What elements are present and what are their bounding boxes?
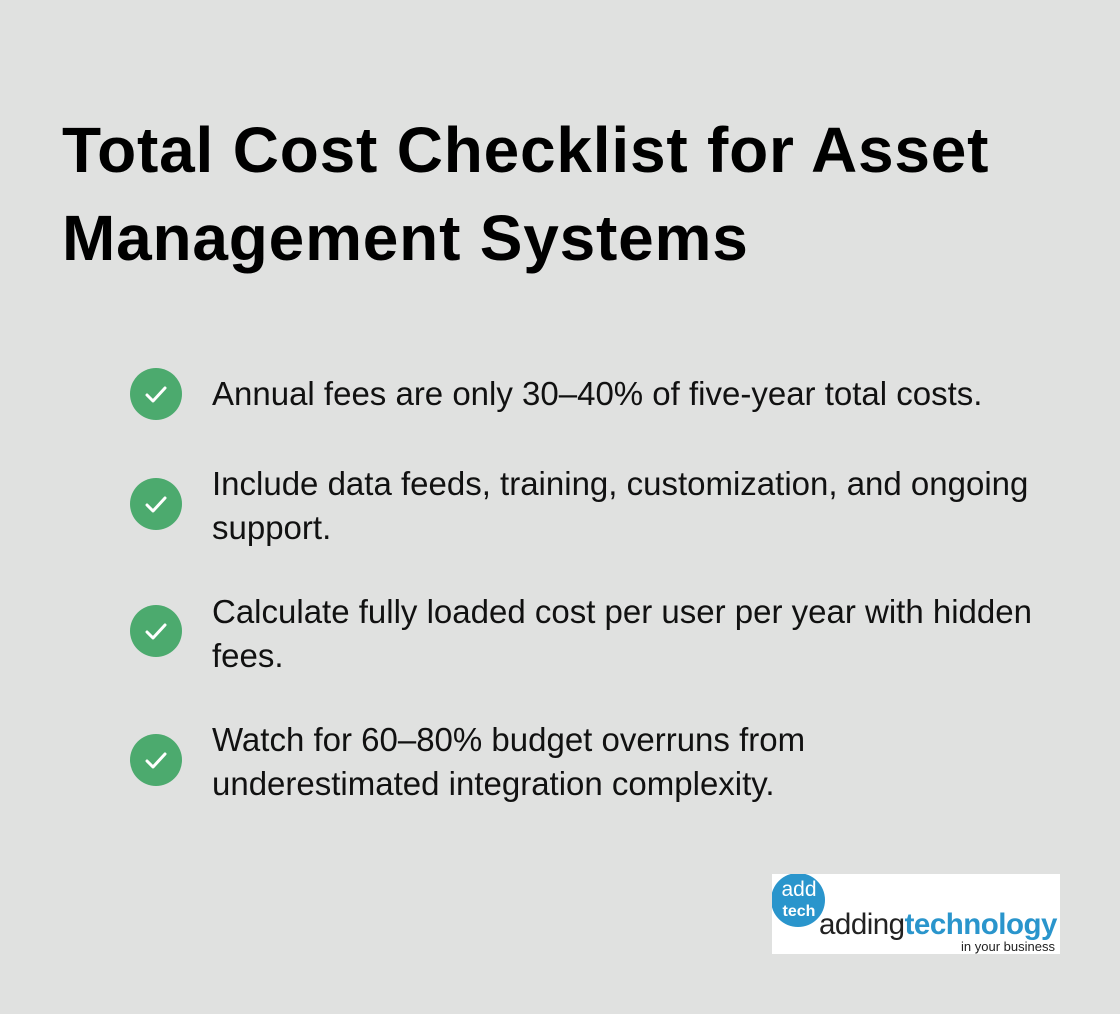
item 2 <box>130 465 1028 546</box>
title: Total Cost Checklist for Asset <box>62 114 989 186</box>
item 1 <box>130 368 982 420</box>
text: Include data feeds, training, customization, and ongoing support. <box>212 465 1028 546</box>
title: Management Systems <box>62 202 749 274</box>
text: Annual fees are only 30–40% of five-year total costs. <box>212 375 982 412</box>
text: Watch for 60–80% budget overruns from underestimated integration complexity. <box>212 721 805 802</box>
logo: in your business <box>961 939 1055 954</box>
item 3 <box>130 593 1032 674</box>
icon: check <box>130 478 182 530</box>
title <box>62 114 989 274</box>
logo: tech <box>783 903 815 920</box>
icon: check <box>130 368 182 420</box>
text: Calculate fully loaded cost per user per year with hidden fees. <box>212 593 1032 674</box>
item 4 <box>130 721 805 802</box>
logo: add <box>781 878 817 901</box>
logo <box>772 874 1060 954</box>
logo: addingtechnology <box>819 908 1058 941</box>
icon: check <box>130 734 182 786</box>
icon: check <box>130 605 182 657</box>
